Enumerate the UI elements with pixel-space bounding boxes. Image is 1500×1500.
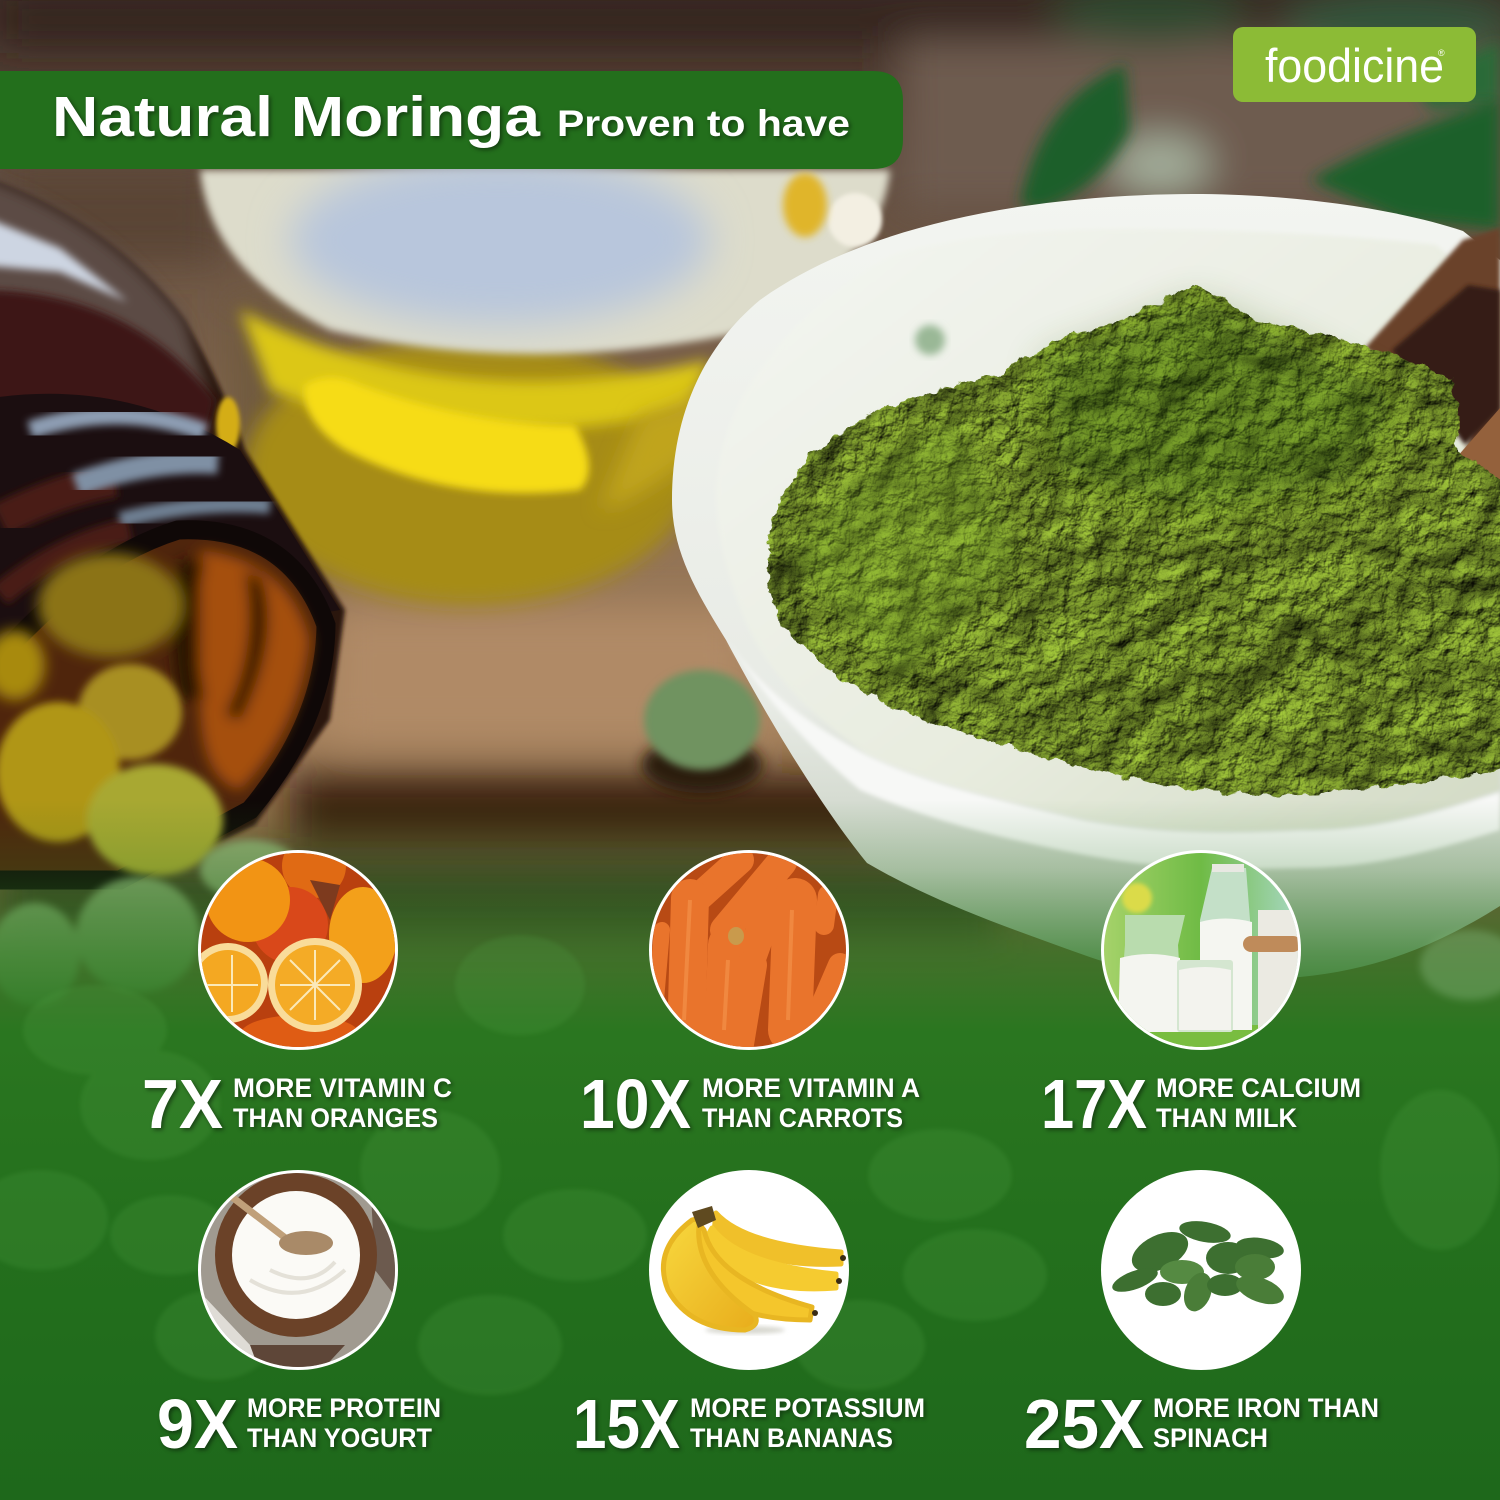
blurred tablets and green overlay [0, 800, 1500, 1500]
stat: potassium [573, 1385, 925, 1463]
stat: vitamin C: 7X [142, 1065, 223, 1143]
icon: spinach [1101, 1170, 1301, 1370]
icon: yogurt [198, 1170, 398, 1372]
title text [52, 85, 850, 149]
stat: iron: SPINACH [1153, 1423, 1268, 1453]
title text: Natural Moringa [52, 85, 541, 149]
stat: iron: 25X [1024, 1385, 1144, 1463]
stat: iron [1024, 1385, 1379, 1463]
stat: potassium: 15X [573, 1385, 680, 1463]
stat: protein: THAN YOGURT [247, 1423, 432, 1453]
stat: protein: MORE PROTEIN [247, 1393, 441, 1423]
icon: bananas [649, 1170, 849, 1370]
stat: potassium: MORE POTASSIUM [690, 1393, 925, 1423]
stat: potassium: THAN BANANAS [690, 1423, 893, 1453]
amber bottle [0, 175, 345, 885]
title text: Proven to have [557, 103, 850, 144]
stat: vitamin A: 10X [580, 1065, 691, 1143]
icon: milk [1101, 850, 1301, 1050]
stat: protein: 9X [157, 1385, 238, 1463]
white bowl [672, 194, 1500, 979]
tablet on table [642, 670, 762, 793]
icon: oranges [198, 850, 398, 1050]
stat: calcium [1041, 1065, 1361, 1143]
icon: carrots [649, 850, 849, 1050]
logo: foodicine [1233, 27, 1476, 102]
logo: foodicine: foodicine [1265, 39, 1444, 92]
stat: iron: MORE IRON THAN [1153, 1393, 1379, 1423]
stat: calcium: MORE CALCIUM [1156, 1073, 1361, 1103]
stat: vitamin C: MORE VITAMIN C [233, 1073, 452, 1103]
stat: vitamin A [580, 1065, 920, 1143]
stat: vitamin C [142, 1065, 452, 1143]
glass of oil [200, 155, 890, 605]
logo: foodicine: ® [1438, 48, 1445, 58]
stat: calcium: 17X [1041, 1065, 1147, 1143]
wooden scoop [1365, 228, 1500, 482]
stat: vitamin A: MORE VITAMIN A [702, 1073, 920, 1103]
stat: calcium: THAN MILK [1156, 1103, 1297, 1133]
stat: protein [157, 1385, 441, 1463]
moringa powder [767, 286, 1500, 795]
stat: vitamin A: THAN CARROTS [702, 1103, 903, 1133]
stat: vitamin C: THAN ORANGES [233, 1103, 438, 1133]
